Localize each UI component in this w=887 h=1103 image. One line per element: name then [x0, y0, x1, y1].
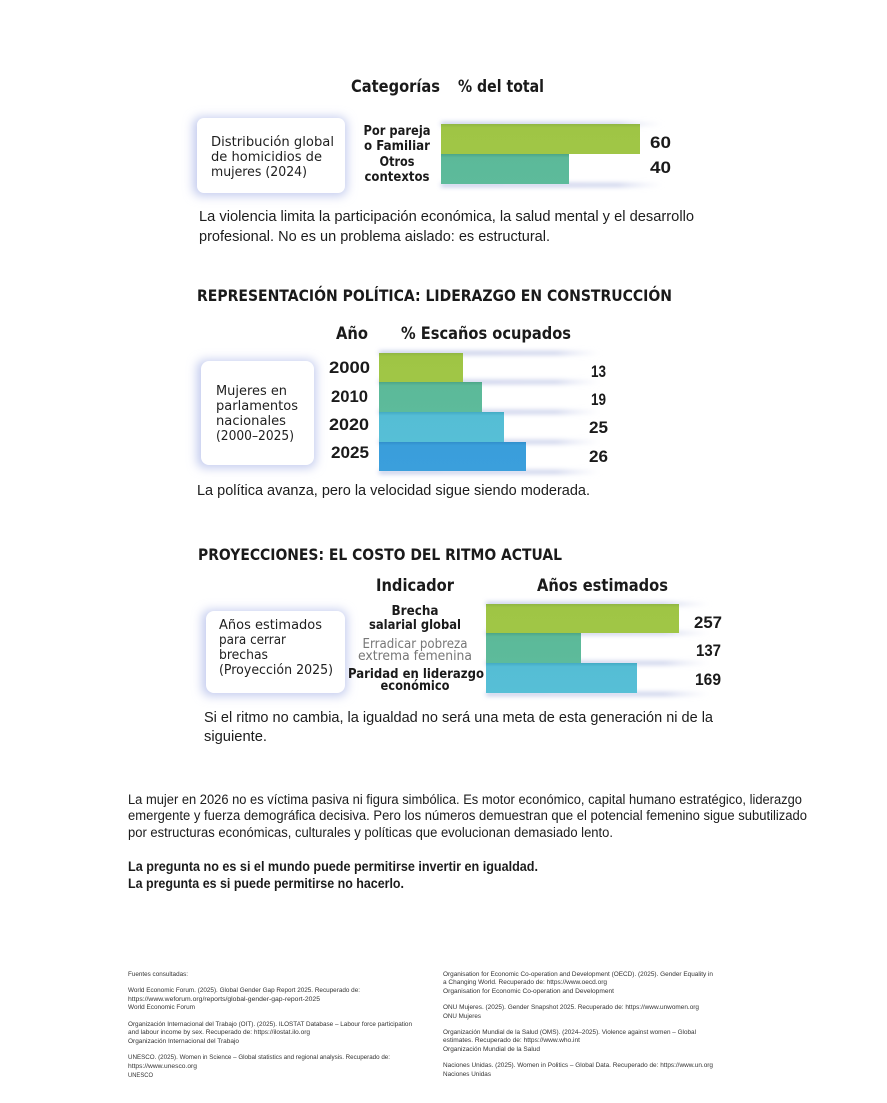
card: años estimados: brechas — [219, 648, 268, 663]
heading: representación política: REPRESENTACIÓN POLÍTICA: LIDERAZGO EN CONSTRUCCIÓN — [197, 286, 672, 305]
card: años estimados: Años estimados — [219, 618, 322, 633]
text: violencia: profesional. No es un problema aislado: es estructural. — [199, 228, 550, 245]
bar chart: años estimados: 257 — [694, 613, 722, 632]
sources: right column: ONU Mujeres — [443, 1013, 482, 1020]
bar chart: años estimados: 169 — [695, 670, 721, 689]
bar chart: escaños: 13 — [591, 362, 606, 381]
card: mujeres en parlamentos: Mujeres en — [216, 384, 287, 399]
card: mujeres en parlamentos: parlamentos — [216, 399, 298, 414]
sources: right column — [443, 971, 713, 1078]
bar chart: años estimados — [486, 602, 722, 696]
card: distribución global: Distribución global — [211, 135, 334, 150]
bar chart: homicidios: 40 — [650, 158, 671, 177]
sources: right column: estimates. Recuperado de: https://www.who.int — [443, 1037, 580, 1044]
indicator labels: económico — [380, 679, 450, 694]
column headers — [336, 324, 571, 343]
sources: right column: Organisation for Economic Co-operation and Development — [443, 988, 614, 995]
text block: conclusión: emergente y fuerza demográfica decisiva. Pero los números demuestran que el potencial femenino sigue subutilizado — [128, 808, 807, 823]
sources: right column: Naciones Unidas — [443, 1071, 492, 1078]
bar chart: años estimados: 137 — [696, 641, 721, 660]
text: si el ritmo no cambia — [204, 709, 714, 745]
card: mujeres en parlamentos — [197, 360, 316, 468]
card: distribución global: mujeres (2024) — [211, 165, 307, 180]
heading: proyecciones: PROYECCIONES: EL COSTO DEL RITMO ACTUAL — [198, 545, 562, 564]
column headers: Años estimados — [537, 576, 668, 595]
category labels: contextos — [364, 170, 430, 185]
sources: right column: Naciones Unidas. (2025). Women in Politics – Global Data. Recuperado de: https://www.un.org — [443, 1062, 713, 1069]
bar chart: homicidios: 60 — [650, 133, 671, 152]
card: distribución global — [193, 117, 347, 196]
text block: la pregunta: La pregunta no es si el mundo puede permitirse invertir en igualdad. — [128, 859, 538, 874]
year labels: 2020 — [329, 415, 369, 434]
text: violencia: La violencia limita la participación económica, la salud mental y el desarrollo — [199, 208, 694, 225]
sources: right column: Organisation for Economic Co-operation and Development (OECD). (2025). Gender Equality in — [443, 971, 713, 978]
year labels: 2010 — [331, 387, 368, 406]
column headers: Indicador — [376, 576, 455, 595]
text block: la pregunta — [128, 859, 538, 891]
sources: left column: Organización Internacional del Trabajo — [128, 1038, 239, 1045]
text block: conclusión — [128, 792, 807, 840]
panel: distribución de homicidios — [193, 77, 694, 245]
sources: left column: World Economic Forum — [128, 1004, 195, 1011]
year labels: 2000 — [329, 358, 370, 377]
sources: left column: World Economic Forum. (2025). Global Gender Gap Report 2025. Recuperado de: — [128, 987, 360, 994]
indicator labels: salarial global — [369, 618, 461, 633]
sources: left column: Fuentes consultadas: — [128, 971, 188, 978]
category labels: Otros — [380, 155, 415, 170]
year labels: 2025 — [331, 443, 369, 462]
bar chart: escaños: 26 — [589, 447, 608, 466]
text: violencia — [199, 208, 694, 245]
column headers — [351, 77, 544, 96]
sources: left column: UNESCO. (2025). Women in Science – Global statistics and regional analysis. Recuperado de: — [128, 1054, 390, 1061]
card: distribución global: de homicidios de — [211, 150, 322, 165]
sources: right column: a Changing World. Recuperado de: https://www.oecd.org — [443, 979, 607, 986]
sources: right column: ONU Mujeres. (2025). Gender Snapshot 2025. Recuperado de: https://www.unwomen.org — [443, 1004, 699, 1011]
text: la política avanza: La política avanza, pero la velocidad sigue siendo moderada. — [197, 482, 590, 499]
card: años estimados: para cerrar — [219, 633, 287, 648]
panel: proyecciones — [198, 545, 722, 745]
text: si el ritmo no cambia: siguiente. — [204, 728, 267, 745]
column headers: % del total — [458, 77, 544, 96]
bar chart: escaños — [379, 351, 608, 474]
indicator labels: extrema femenina — [358, 649, 472, 664]
category labels: o Familiar — [364, 139, 431, 154]
text block: la pregunta: La pregunta es si puede permitirse no hacerlo. — [128, 876, 404, 891]
card: años estimados: (Proyección 2025) — [219, 663, 333, 678]
column headers: Categorías — [351, 77, 440, 96]
card: años estimados — [202, 610, 347, 696]
text block: conclusión: por estructuras económicas, culturales y políticas que evolucionan demasiado lento. — [128, 825, 613, 840]
sources: left column: Organización Internacional del Trabajo (OIT). (2025). ILOSTAT Database – Labour force participation — [128, 1021, 412, 1028]
sources: left column: https://www.weforum.org/reports/global-gender-gap-report-2025 — [128, 996, 320, 1003]
category labels: Por pareja — [364, 124, 430, 139]
bar chart: homicidios — [441, 122, 671, 187]
category labels — [364, 124, 431, 185]
indicator labels: Paridad en liderazgo — [348, 667, 484, 682]
column headers: % Escaños ocupados — [401, 324, 571, 343]
sources: left column — [128, 971, 412, 1079]
column headers — [376, 576, 668, 595]
column headers: Año — [336, 324, 368, 343]
sources: left column: UNESCO — [128, 1072, 153, 1079]
sources: left column: https://www.unesco.org — [128, 1063, 197, 1070]
card: mujeres en parlamentos: (2000–2025) — [216, 429, 294, 444]
card: mujeres en parlamentos: nacionales — [216, 414, 286, 429]
bar chart: escaños: 19 — [591, 390, 606, 409]
sources: right column: Organización Mundial de la Salud (OMS). (2024–2025). Violence against women – Global — [443, 1029, 697, 1036]
indicator labels — [348, 604, 484, 694]
panel: representación política — [197, 286, 672, 499]
text block: conclusión: La mujer en 2026 no es víctima pasiva ni figura simbólica. Es motor económico, capital humano estratégico, liderazgo — [128, 792, 802, 807]
sources: right column: Organización Mundial de la Salud — [443, 1046, 540, 1053]
indicator labels: Erradicar pobreza — [362, 637, 468, 652]
year labels — [329, 358, 370, 462]
indicator labels: Brecha — [392, 604, 438, 619]
sources: left column: and labour income by sex. Recuperado de: https://ilostat.ilo.org — [128, 1029, 310, 1036]
bar chart: escaños: 25 — [589, 418, 608, 437]
text: si el ritmo no cambia: Si el ritmo no cambia, la igualdad no será una meta de esta generación ni de la — [204, 709, 714, 726]
